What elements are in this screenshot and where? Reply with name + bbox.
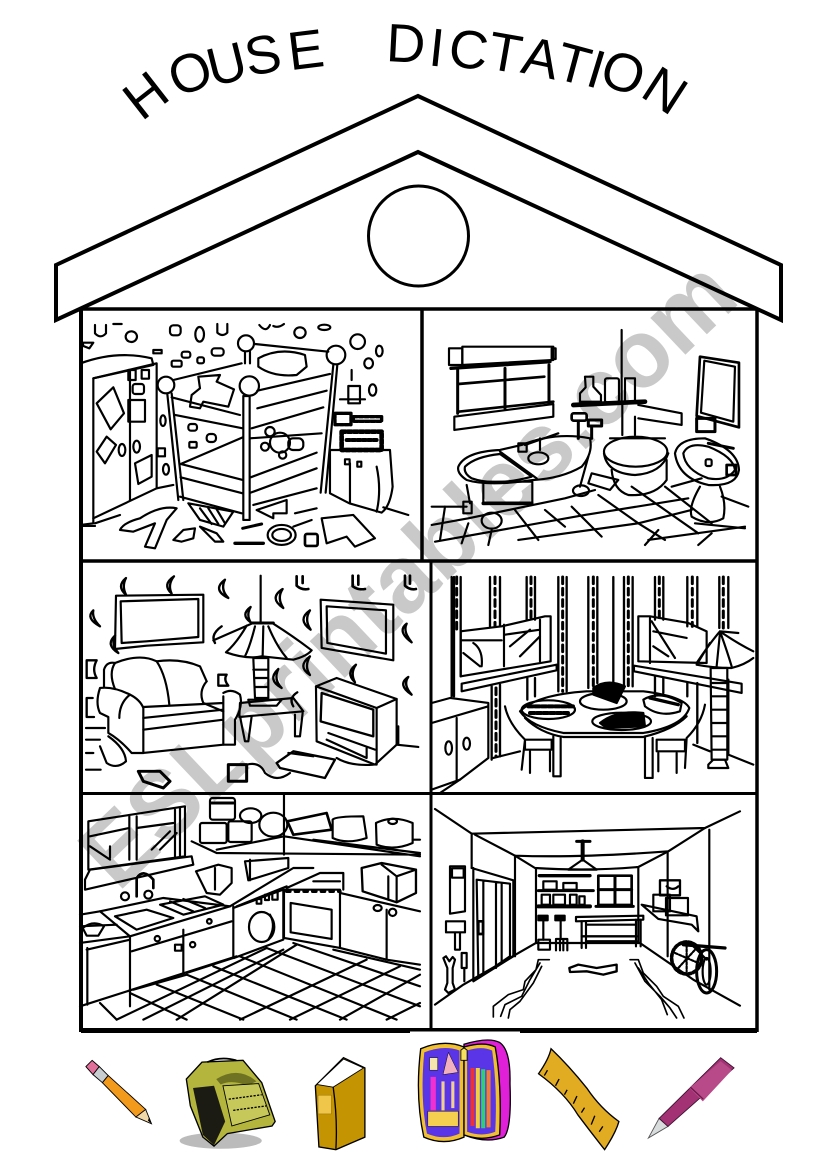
sink [675, 418, 739, 522]
title: A [517, 25, 565, 91]
title: O [593, 38, 653, 108]
tall cupboards [340, 893, 420, 965]
door [472, 868, 513, 981]
tiled floor [432, 473, 748, 545]
floor cracks and rug [493, 960, 684, 1018]
shelves [538, 876, 593, 906]
ceiling lamp [568, 841, 597, 870]
lamp [213, 576, 312, 706]
side table [239, 698, 303, 741]
windows [461, 616, 742, 693]
icon: pencil [86, 1060, 152, 1124]
shelf and bottles [573, 330, 682, 435]
worktop appliances [121, 858, 416, 902]
floor clutter [86, 728, 373, 788]
food plates [522, 683, 682, 730]
icon: book [315, 1058, 365, 1150]
ceiling and walls [435, 809, 740, 1006]
television cabinet [316, 678, 418, 765]
picture left [115, 595, 203, 649]
school items [86, 1040, 734, 1150]
window [85, 806, 193, 890]
sofa [97, 658, 241, 753]
roof window [368, 186, 468, 286]
title: C [445, 18, 492, 83]
dining table [520, 691, 689, 778]
title: U [200, 31, 253, 98]
icon: ruler [539, 1049, 619, 1150]
cooker [284, 873, 343, 948]
house walls [81, 309, 757, 1033]
room: garage [435, 809, 740, 1018]
title: T [550, 31, 597, 98]
room: bathroom [432, 330, 748, 545]
title: O [160, 38, 221, 109]
cupboards [432, 698, 520, 793]
title: I [426, 17, 447, 79]
title: H [112, 60, 180, 131]
roof [56, 96, 781, 320]
checker floor [80, 943, 420, 1020]
room: living room [86, 576, 418, 788]
chairs [505, 705, 705, 773]
room: bedroom [81, 324, 408, 548]
icon: pencil case [418, 1040, 510, 1142]
room: kitchen [80, 795, 420, 1020]
bath [458, 413, 602, 504]
title: E [284, 18, 327, 82]
back window [596, 876, 633, 906]
title: S [240, 23, 286, 88]
moon wallpaper [87, 576, 416, 717]
icon: backpack [180, 1058, 275, 1149]
title: D [385, 13, 427, 75]
floor lamp [693, 631, 753, 768]
washing machine [233, 890, 283, 958]
floor items [81, 500, 375, 548]
wall spots [83, 324, 383, 475]
garden tools [538, 916, 567, 950]
title: I [580, 39, 612, 101]
wall tools [443, 866, 467, 993]
title [112, 13, 697, 131]
watermark: ESLprintables.com [59, 239, 756, 908]
curtain stripes [452, 577, 728, 760]
picture right [321, 600, 393, 660]
wardrobe [81, 355, 173, 525]
base units [87, 906, 233, 1006]
title: N [632, 55, 697, 127]
workbench [576, 916, 643, 948]
boxes on shelf [642, 880, 698, 931]
bedside table and clutter [330, 370, 408, 515]
mirror [697, 357, 739, 427]
title: T [484, 21, 527, 86]
bicycle [672, 942, 725, 993]
bunk bed [158, 335, 345, 520]
icon: pen [648, 1058, 734, 1138]
window with blind [449, 347, 556, 430]
room: dining room [432, 577, 753, 793]
wall divider and shelf [192, 795, 420, 856]
worktop and sink [80, 868, 313, 943]
toilet [604, 437, 668, 495]
